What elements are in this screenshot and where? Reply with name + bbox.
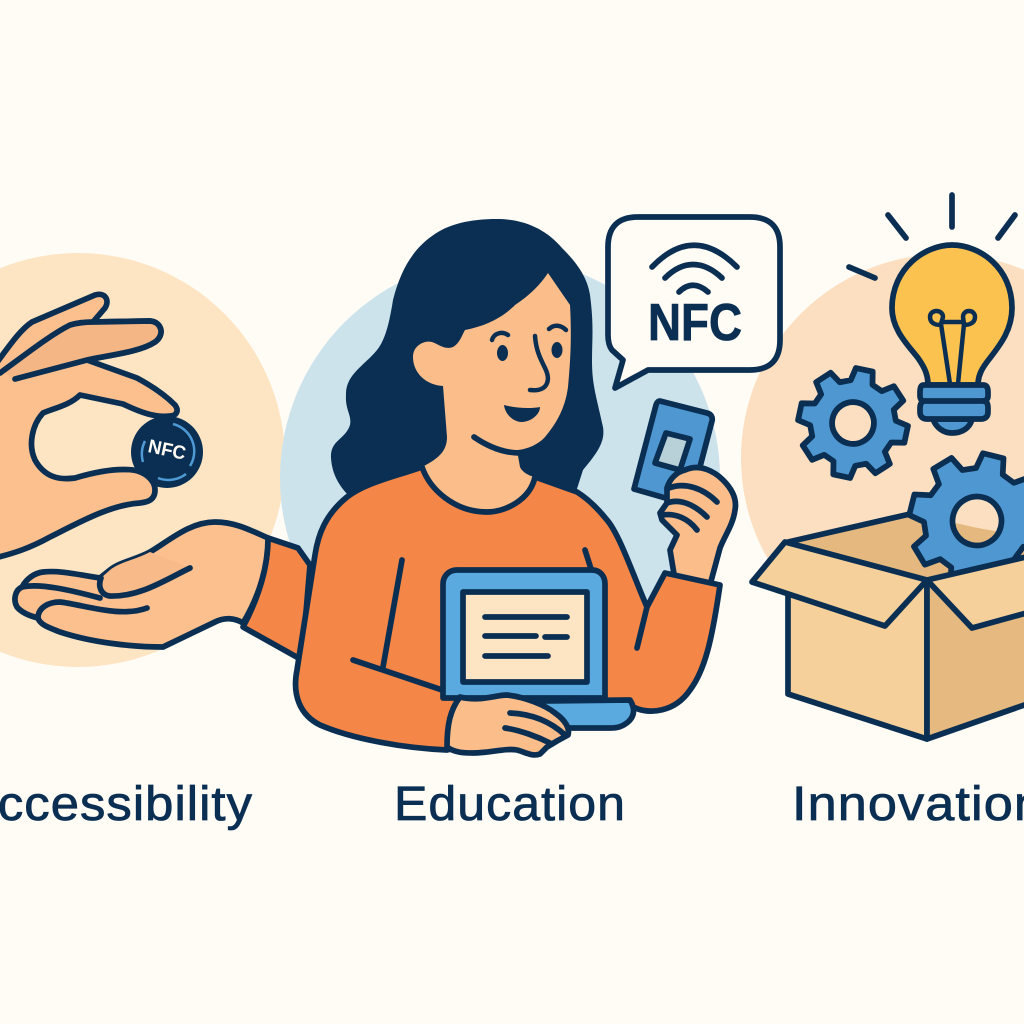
icon: open box interior	[788, 514, 1024, 620]
laptop	[443, 570, 634, 728]
icon: box left flap	[752, 542, 927, 626]
icon: pinching upper hand	[0, 294, 177, 558]
icon: wireless waves	[652, 245, 737, 292]
icon: light rays	[849, 195, 1015, 278]
label: Education: Education	[394, 778, 626, 831]
raised hand holding card	[660, 467, 736, 585]
icon: box right face	[927, 580, 1024, 739]
icon: NFC coin tag: NFC	[146, 436, 188, 465]
icon: orange sleeve	[243, 538, 310, 660]
icon: box right flap	[927, 556, 1024, 628]
NFC label: NFC	[648, 294, 742, 352]
face features	[474, 326, 566, 453]
icon: small gear	[789, 359, 917, 487]
hair	[331, 219, 603, 497]
label: Innovation: Innovation	[792, 778, 1024, 831]
icon: light bulb	[892, 245, 1012, 433]
panel: innovation bulb, gears and box	[752, 195, 1024, 739]
laptop screen text lines	[485, 617, 567, 656]
speech bubble with NFC	[608, 217, 780, 388]
NFC card	[634, 401, 712, 505]
icon: large gear	[896, 440, 1024, 602]
orange sweater	[296, 467, 720, 750]
panel: accessibility hands and NFC tag	[0, 294, 310, 660]
background circle: education	[280, 258, 720, 698]
icon: open lower hand	[15, 522, 268, 647]
sweater fold lines	[353, 550, 647, 696]
background circle: accessibility	[0, 253, 285, 667]
face and neck	[413, 273, 571, 520]
icon: NFC coin tag	[131, 416, 203, 488]
icon: box left face	[788, 580, 927, 739]
hand on laptop	[447, 695, 568, 755]
panel: education woman with laptop	[296, 217, 780, 755]
background circle: innovation	[741, 254, 1024, 662]
